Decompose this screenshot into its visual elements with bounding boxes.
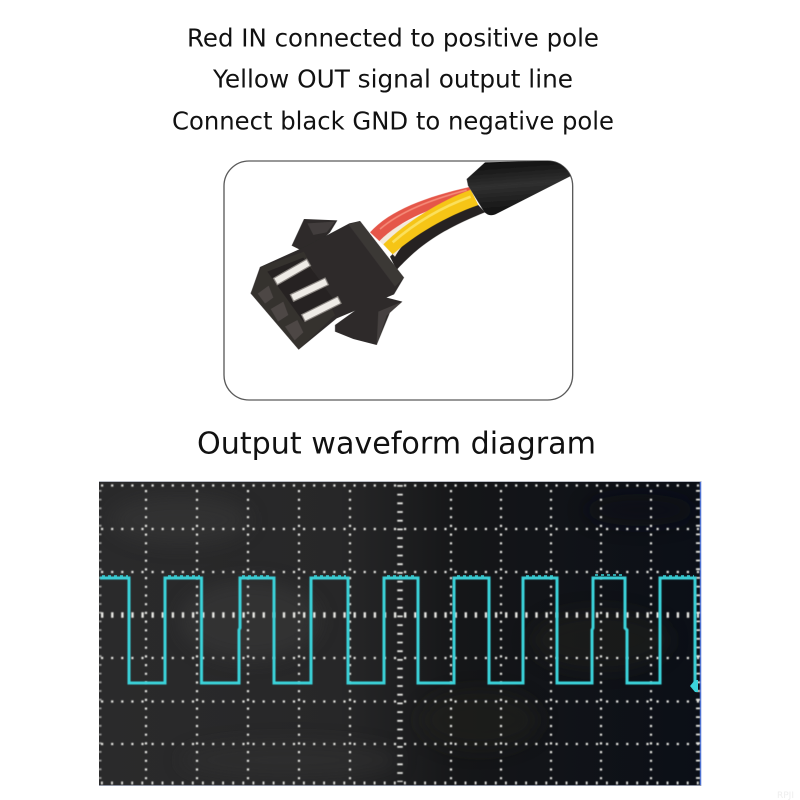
upper recesses	[267, 258, 335, 322]
white wire highlight	[377, 208, 443, 257]
wiring instructions text	[172, 24, 614, 136]
wiring instructions text: Yellow OUT signal output line	[212, 64, 573, 94]
black wire	[390, 203, 485, 270]
red wire	[370, 187, 473, 241]
oscilloscope screen	[99, 481, 701, 786]
panel: connector photo	[224, 160, 574, 400]
screen edge	[700, 481, 702, 786]
heading: output waveform diagram: Output waveform diagram	[197, 426, 596, 462]
ground marker	[690, 680, 698, 692]
connector face	[251, 252, 335, 350]
wiring instructions text: Connect black GND to negative pole	[172, 106, 614, 136]
yellow wire	[383, 190, 478, 254]
panel frame	[224, 161, 573, 400]
wiring instructions text: Red IN connected to positive pole	[187, 24, 599, 52]
connector body	[251, 221, 404, 350]
grid lines	[100, 485, 699, 783]
chart: oscilloscope waveform	[99, 481, 701, 786]
socket holes	[258, 286, 273, 304]
rear latch	[292, 219, 337, 253]
square wave trace	[100, 578, 695, 684]
icon: cable with wires and connector	[251, 160, 574, 350]
lower latch	[335, 295, 402, 345]
cable jacket	[467, 160, 574, 215]
metal pins	[279, 264, 336, 316]
trace top highlight noise	[102, 575, 694, 576]
